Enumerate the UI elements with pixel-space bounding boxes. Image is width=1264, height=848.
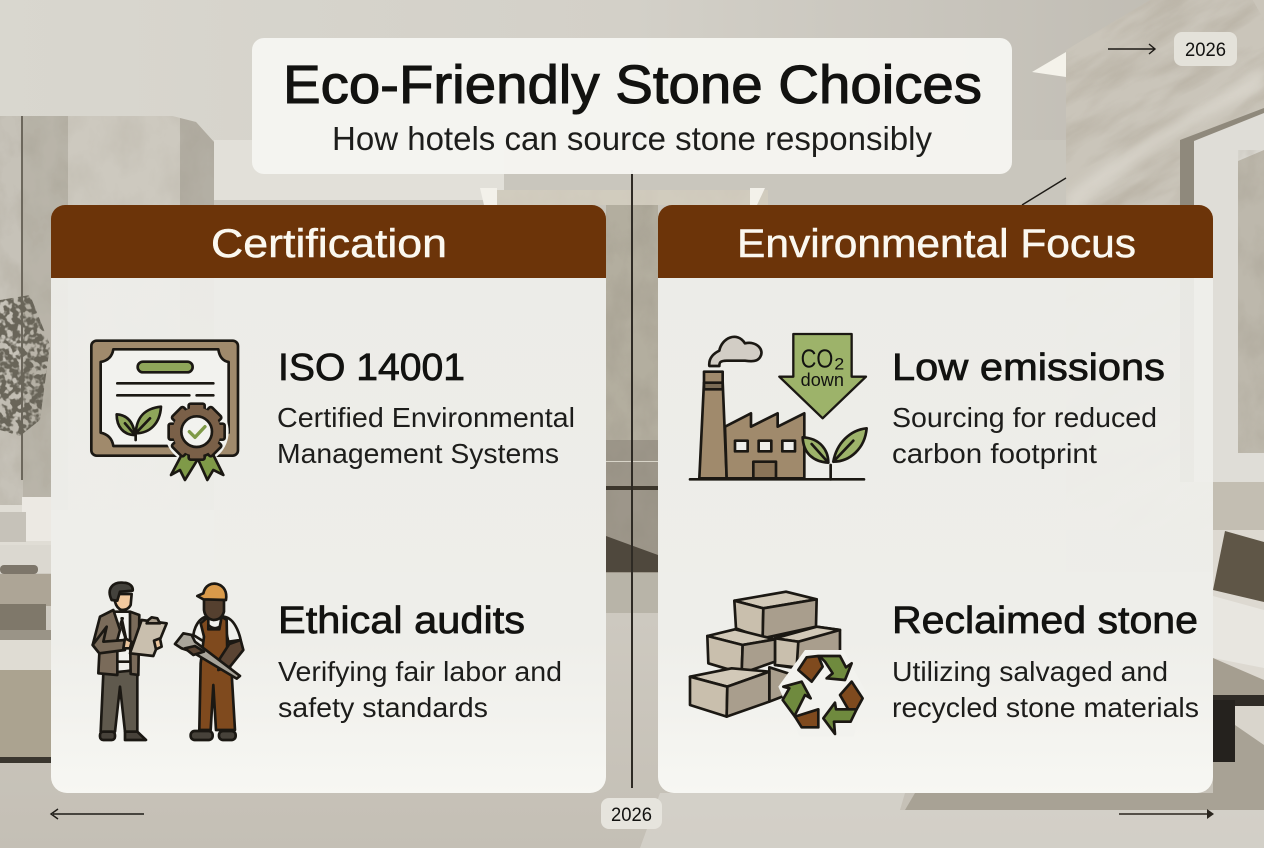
background: right sofa, cushion, table [905,482,1264,810]
icon: stone blocks with recycling symbol [690,592,867,737]
background: central marble column [497,190,658,573]
background: left stone wall [0,116,214,505]
heading: reclaimed stone: Reclaimed stone [892,600,1198,642]
heading: low emissions: Low emissions [892,347,1165,389]
auditor [93,583,167,740]
text: ISO 14001 description: Certified Environmental [277,402,575,433]
text: low emissions description: carbon footprint [892,438,1097,469]
panel header: environmental focus: Environmental Focus [737,222,1136,266]
icon: auditor and worker [93,583,243,740]
text: ISO 14001 description [277,402,575,469]
title card [252,38,1012,174]
panel header: environmental focus [658,205,1213,278]
panel header: certification: Certification [211,222,447,266]
heading: ethical audits: Ethical audits [278,600,525,642]
text: reclaimed stone description [892,656,1199,723]
text: ethical audits description [278,656,562,723]
badge: 2026 bottom [601,798,662,829]
panel: certification [51,205,606,793]
text: reclaimed stone description: Utilizing salvaged and [892,656,1168,687]
connector lines [632,170,1066,788]
arrow: bottom right [1119,813,1207,815]
heading: ISO 14001: ISO 14001 [278,347,465,389]
icon: factory with CO2 down arrow: CO [801,344,833,374]
background: skylight [1032,52,1066,77]
icon: factory with CO2 down arrow [690,334,867,479]
background: tree [0,290,52,440]
badge: 2026 top [1174,32,1237,66]
text: low emissions description [892,402,1157,469]
badge: 2026 top: 2026 [1185,40,1226,61]
panel header: certification [51,205,606,278]
text: ISO 14001 description: Management Systems [277,438,559,469]
panel: environmental focus [658,205,1213,793]
background: floor light patch [640,793,1264,848]
icon: factory with CO2 down arrow: 2 [834,354,844,373]
worker [175,584,243,740]
background: left sofa and table [0,497,51,763]
text: reclaimed stone description: recycled stone materials [892,692,1199,723]
text: ethical audits description: safety standards [278,692,488,723]
arrow: top right [1108,44,1155,54]
badge: 2026 bottom: 2026 [611,805,652,826]
subtitle: How hotels can source stone responsibly [332,120,932,157]
icon: factory with CO2 down arrow: down [801,369,844,390]
title: Eco-Friendly Stone Choices [283,55,982,115]
background: right marble wall [1066,0,1264,482]
text: low emissions description: Sourcing for reduced [892,402,1157,433]
text: ethical audits description: Verifying fair labor and [278,656,562,687]
arrow: bottom left [51,809,144,819]
icon: certificate with rosette [91,341,238,480]
